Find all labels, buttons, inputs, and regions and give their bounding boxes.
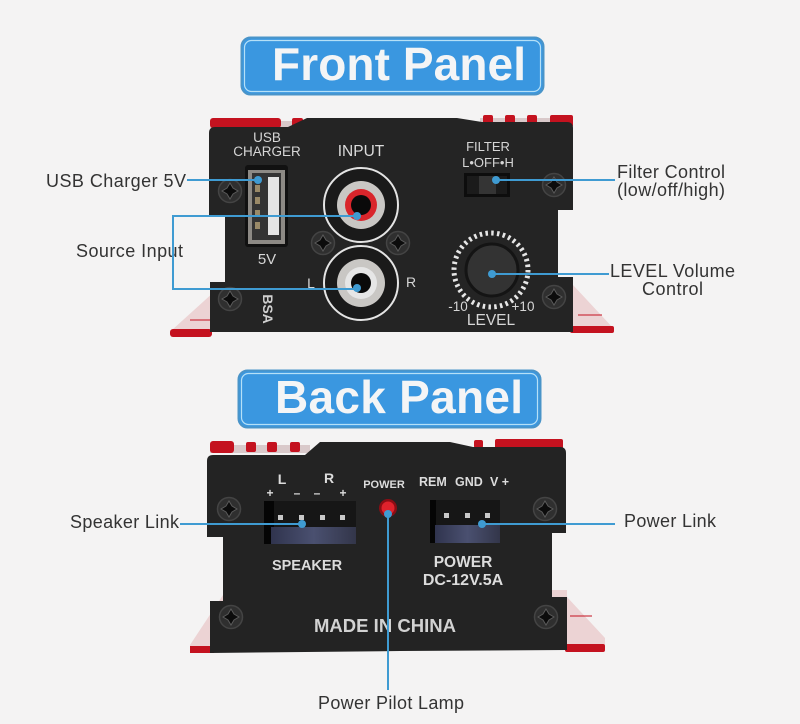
power lamp bbox=[379, 499, 397, 517]
made in china: MADE IN CHINA bbox=[314, 615, 456, 636]
filter label: FILTER bbox=[466, 139, 510, 154]
L R labels bbox=[307, 274, 416, 291]
callout: LEVEL Volume Control: LEVEL Volume bbox=[610, 261, 735, 281]
filter label: L•OFF•H bbox=[462, 155, 514, 170]
level labels bbox=[448, 299, 534, 329]
front screws bbox=[218, 180, 242, 202]
power rating text bbox=[423, 554, 504, 589]
power rating text: DC-12V.5A bbox=[423, 572, 504, 589]
USB label: 5V bbox=[258, 251, 276, 268]
speaker terminal labels: – bbox=[314, 486, 321, 500]
L R labels: R bbox=[406, 274, 416, 290]
power terminal labels bbox=[419, 475, 509, 489]
callout: USB Charger 5V: USB Charger 5V bbox=[46, 171, 186, 191]
back red fins bbox=[190, 439, 605, 653]
speaker terminal labels: + bbox=[339, 486, 347, 500]
level labels: -10 bbox=[448, 299, 468, 314]
callout: Power Pilot Lamp bbox=[318, 510, 464, 713]
back screws bbox=[218, 498, 240, 520]
callout: Power Link bbox=[478, 511, 717, 531]
speaker terminal labels: + bbox=[266, 486, 274, 500]
callout: Source Input: Source Input bbox=[76, 241, 183, 261]
USB label: USB bbox=[253, 130, 281, 145]
power terminal labels: GND bbox=[455, 475, 483, 489]
back body bbox=[207, 442, 567, 653]
L R labels: L bbox=[307, 275, 315, 291]
USB label bbox=[233, 130, 301, 268]
speaker terminal labels: R bbox=[324, 470, 334, 486]
callout: Speaker Link: Speaker Link bbox=[70, 512, 180, 532]
callout: USB Charger 5V bbox=[46, 171, 262, 191]
speaker connector bbox=[264, 501, 356, 544]
white RCA socket bbox=[324, 246, 398, 320]
red RCA socket bbox=[324, 168, 398, 242]
heading: Back Panel: Back Panel bbox=[275, 371, 523, 423]
power rating text: POWER bbox=[434, 554, 492, 571]
callout: Source Input bbox=[76, 212, 361, 292]
filter switch bbox=[464, 173, 510, 197]
power terminal labels: REM bbox=[419, 475, 447, 489]
panel: back amplifier photo bbox=[190, 439, 605, 653]
speaker terminal labels: L bbox=[278, 471, 287, 487]
callout: Filter Control bbox=[492, 162, 725, 200]
level labels: LEVEL bbox=[467, 312, 516, 329]
USB port bbox=[245, 165, 288, 247]
speaker terminal labels: – bbox=[294, 486, 301, 500]
callout: Filter Control: (low/off/high) bbox=[617, 180, 725, 200]
power terminal labels: V + bbox=[490, 475, 509, 489]
USB label: CHARGER bbox=[233, 144, 301, 159]
POWER lamp label: POWER bbox=[363, 479, 405, 491]
callout: LEVEL Volume Control: Control bbox=[642, 279, 703, 299]
power connector bbox=[430, 500, 500, 543]
level knob bbox=[454, 233, 528, 307]
callout: Power Pilot Lamp: Power Pilot Lamp bbox=[318, 693, 464, 713]
level labels: +10 bbox=[512, 299, 534, 314]
callout: Power Link: Power Link bbox=[624, 511, 717, 531]
callout: LEVEL Volume Control bbox=[488, 261, 735, 299]
filter label bbox=[462, 139, 514, 170]
INPUT label: INPUT bbox=[338, 143, 385, 160]
heading: Front Panel: Front Panel bbox=[272, 38, 526, 90]
front red fins bbox=[170, 115, 614, 337]
speaker terminal labels: SPEAKER bbox=[272, 558, 343, 574]
callout: Speaker Link bbox=[70, 512, 306, 532]
USB logo mark: BSA bbox=[260, 294, 276, 324]
front body bbox=[209, 118, 573, 332]
speaker terminal labels bbox=[266, 470, 347, 574]
callout: Filter Control: Filter Control bbox=[617, 162, 725, 182]
panel: front amplifier photo bbox=[170, 115, 614, 337]
